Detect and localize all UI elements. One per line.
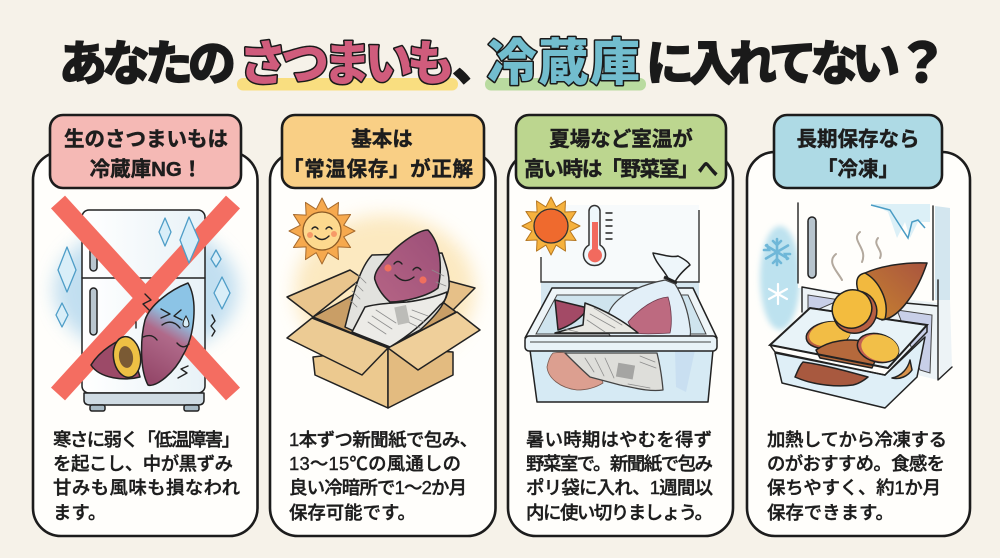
box back	[287, 270, 362, 317]
fridge interior	[541, 282, 699, 337]
cold potato character	[136, 283, 215, 385]
title text: lead: あなたの	[59, 38, 236, 91]
hot sun	[522, 197, 580, 255]
body text: 保存できます。	[767, 502, 894, 523]
title	[59, 34, 949, 94]
body text: 野菜室で。新聞紙で包み	[526, 453, 713, 474]
body text: 暑い時期はやむを得ず	[526, 429, 712, 450]
body text: 保存可能です。	[289, 502, 416, 523]
newspaper back	[345, 253, 449, 347]
highlight: yellow	[237, 78, 458, 90]
header: room temperature: 基本は	[351, 128, 413, 151]
thermometer	[584, 206, 612, 266]
highlight: green	[485, 78, 646, 90]
ice crystals	[56, 217, 230, 327]
body text: 13〜15℃の風通しの	[289, 453, 461, 474]
header: vegetable drawer: 夏場など室温が	[549, 127, 693, 151]
header: freezer	[774, 115, 942, 188]
illustration: box	[287, 198, 480, 408]
sweet potato	[864, 263, 927, 320]
body text	[53, 429, 240, 523]
body text	[526, 429, 713, 523]
title text: comma: 、	[452, 38, 500, 91]
panel: freezer	[747, 115, 970, 536]
body text: 加熱してから冷凍する	[767, 429, 947, 450]
card	[747, 152, 970, 536]
header: freezer: 長期保存なら	[796, 128, 920, 151]
panel: room temperature	[270, 115, 496, 536]
header: refrigerator NG: 冷蔵庫NG！	[90, 158, 202, 181]
header: vegetable drawer	[516, 115, 726, 188]
card	[508, 152, 733, 536]
illustration: freezer	[760, 203, 952, 408]
body text: 1本ずつ新聞紙で包み、	[289, 429, 478, 450]
header: vegetable drawer: 高い時は「野菜室」へ	[524, 158, 718, 181]
potato slice	[826, 283, 884, 340]
sun	[289, 198, 355, 264]
title text: question mark: ？	[895, 34, 949, 94]
body text: ます。	[53, 502, 106, 523]
potato in newspaper	[555, 300, 588, 330]
illustration: cold fridge	[54, 202, 238, 411]
header: room temperature: 「常温保存」が正解	[283, 157, 473, 181]
body text: 内に使い切りましょう。	[526, 502, 713, 523]
title text: fridge: 冷蔵庫	[487, 35, 640, 91]
body text	[289, 429, 478, 523]
cut potato	[91, 335, 143, 379]
title text: tail: に入れてない	[646, 38, 900, 91]
body text: のがおすすめ。食感を	[767, 453, 945, 474]
box flaps	[313, 348, 388, 408]
drawer back	[525, 288, 717, 338]
snowflakes	[764, 239, 790, 265]
body text: を起こし、中が黒ずみ	[53, 453, 233, 474]
potato	[375, 230, 440, 302]
header: room temperature	[282, 115, 484, 188]
card	[270, 152, 496, 536]
header: refrigerator NG	[50, 115, 241, 188]
container rim	[770, 308, 927, 368]
body text: 甘みも風味も損なわれ	[53, 477, 240, 498]
header: freezer: 「冷凍」	[817, 158, 899, 181]
drawer rim	[525, 336, 717, 351]
newspaper front	[352, 292, 447, 347]
title text: sweet potato: さつまいも	[239, 38, 455, 91]
body text: 良い冷暗所で1〜2か月	[289, 477, 467, 498]
body text: 寒さに弱く「低温障害」	[53, 429, 240, 450]
container back	[770, 308, 927, 368]
body text: ポリ袋に入れ、1週間以	[526, 477, 713, 498]
body text: 保ちやすく、約1か月	[767, 477, 941, 498]
potato pieces in container	[804, 318, 852, 352]
body text	[767, 429, 947, 523]
steam	[832, 232, 881, 280]
container front	[775, 337, 925, 408]
plastic bag	[606, 253, 691, 387]
lower fridge	[802, 287, 952, 380]
illustration: vegetable compartment	[522, 197, 717, 402]
card	[33, 152, 258, 536]
panel: refrigerator NG	[33, 115, 258, 536]
drawer front	[530, 350, 713, 402]
red X	[58, 202, 233, 394]
panel: vegetable drawer	[508, 115, 733, 536]
header: refrigerator NG: 生のさつまいもは	[64, 128, 228, 151]
